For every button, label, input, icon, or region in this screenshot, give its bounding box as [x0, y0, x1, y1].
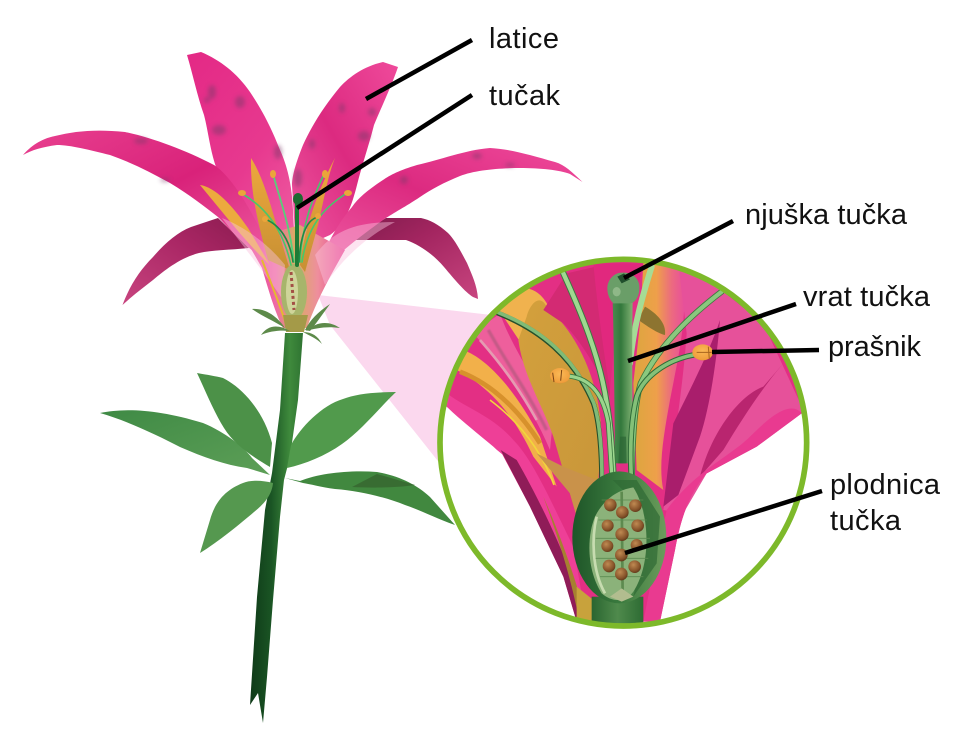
inset: stem base	[592, 597, 643, 627]
petal: left	[23, 131, 275, 262]
translucent veil	[222, 218, 285, 300]
petal: back left	[122, 218, 249, 305]
inset: ovules	[601, 499, 644, 580]
flower throat with gold stripes	[200, 158, 395, 332]
flower tube	[246, 225, 345, 328]
inset: crimson fold behind stamens	[543, 263, 610, 397]
label: vrat tučka: vrat tučka	[803, 281, 931, 313]
spots on top-right petal	[294, 103, 376, 187]
inset: far filaments	[630, 267, 722, 483]
label: plodnica tučka: tučka	[830, 505, 902, 537]
inset: near filaments	[498, 273, 693, 488]
label: plodnica tučka: plodnica	[830, 469, 941, 501]
inset: right gold panel	[633, 263, 685, 490]
inset: right anther	[692, 344, 713, 360]
inset: central gold panel	[518, 300, 602, 517]
magnified inset circle	[430, 250, 820, 627]
leaf: far left	[100, 410, 270, 475]
leaf: upper left	[197, 373, 272, 467]
gold stripe: top-left petal	[251, 158, 290, 270]
gold stripe: top-right petal	[300, 158, 335, 272]
small ovary	[281, 264, 307, 320]
leaf: right	[285, 471, 455, 525]
leader line: njuška tučka	[624, 221, 733, 278]
spots on top-left petal	[204, 85, 282, 159]
inset: tan wedge	[537, 453, 597, 517]
inset: green ring	[440, 259, 807, 626]
inset: left gold stripes	[450, 350, 557, 487]
leaf: upper right	[287, 392, 396, 468]
label: prašnik: prašnik	[828, 331, 922, 363]
leader line: prašnik	[712, 350, 819, 352]
petal spots	[134, 85, 515, 187]
inset: left anther	[550, 368, 570, 383]
inset: gold beside stem base	[577, 587, 593, 622]
spots on side petals	[134, 138, 515, 184]
label: plodnica tučka	[830, 469, 941, 537]
sepals	[252, 304, 340, 344]
stem	[250, 333, 303, 723]
inset: ovary	[572, 471, 666, 603]
leader line: tučak	[297, 95, 472, 208]
leader line: latice	[366, 40, 472, 99]
tube base	[283, 315, 308, 332]
label: latice: latice	[489, 23, 559, 55]
leader line: plodnica tučka	[625, 491, 822, 553]
leaf shadow: right	[352, 474, 415, 488]
leaves	[100, 373, 455, 553]
petal: right	[320, 148, 582, 262]
inset: yellow streak	[490, 400, 554, 485]
gold stripe: left petal	[200, 185, 270, 265]
label: tučak: tučak	[489, 80, 560, 112]
petal: back right	[350, 218, 478, 299]
stamens and pistil in the flower	[238, 170, 352, 265]
pink magnification cone	[318, 295, 500, 470]
inset: left pink folds	[473, 313, 553, 450]
inset: dark crimson outer fold	[500, 450, 577, 617]
inset: left outer pink edge	[447, 393, 583, 603]
inset: pistil style	[613, 300, 633, 463]
leader line: vrat tučka	[628, 304, 796, 361]
petal: top left	[187, 52, 295, 250]
leaf: lower left	[200, 481, 273, 553]
label: njuška tučka: njuška tučka	[745, 199, 908, 231]
inset: stigma	[607, 273, 639, 303]
petal: top right	[292, 62, 398, 250]
inset: right pink panel	[663, 263, 803, 513]
inset: petal background	[446, 262, 802, 622]
yellow edge	[262, 260, 287, 327]
inset: right dark magenta folds	[663, 320, 720, 507]
